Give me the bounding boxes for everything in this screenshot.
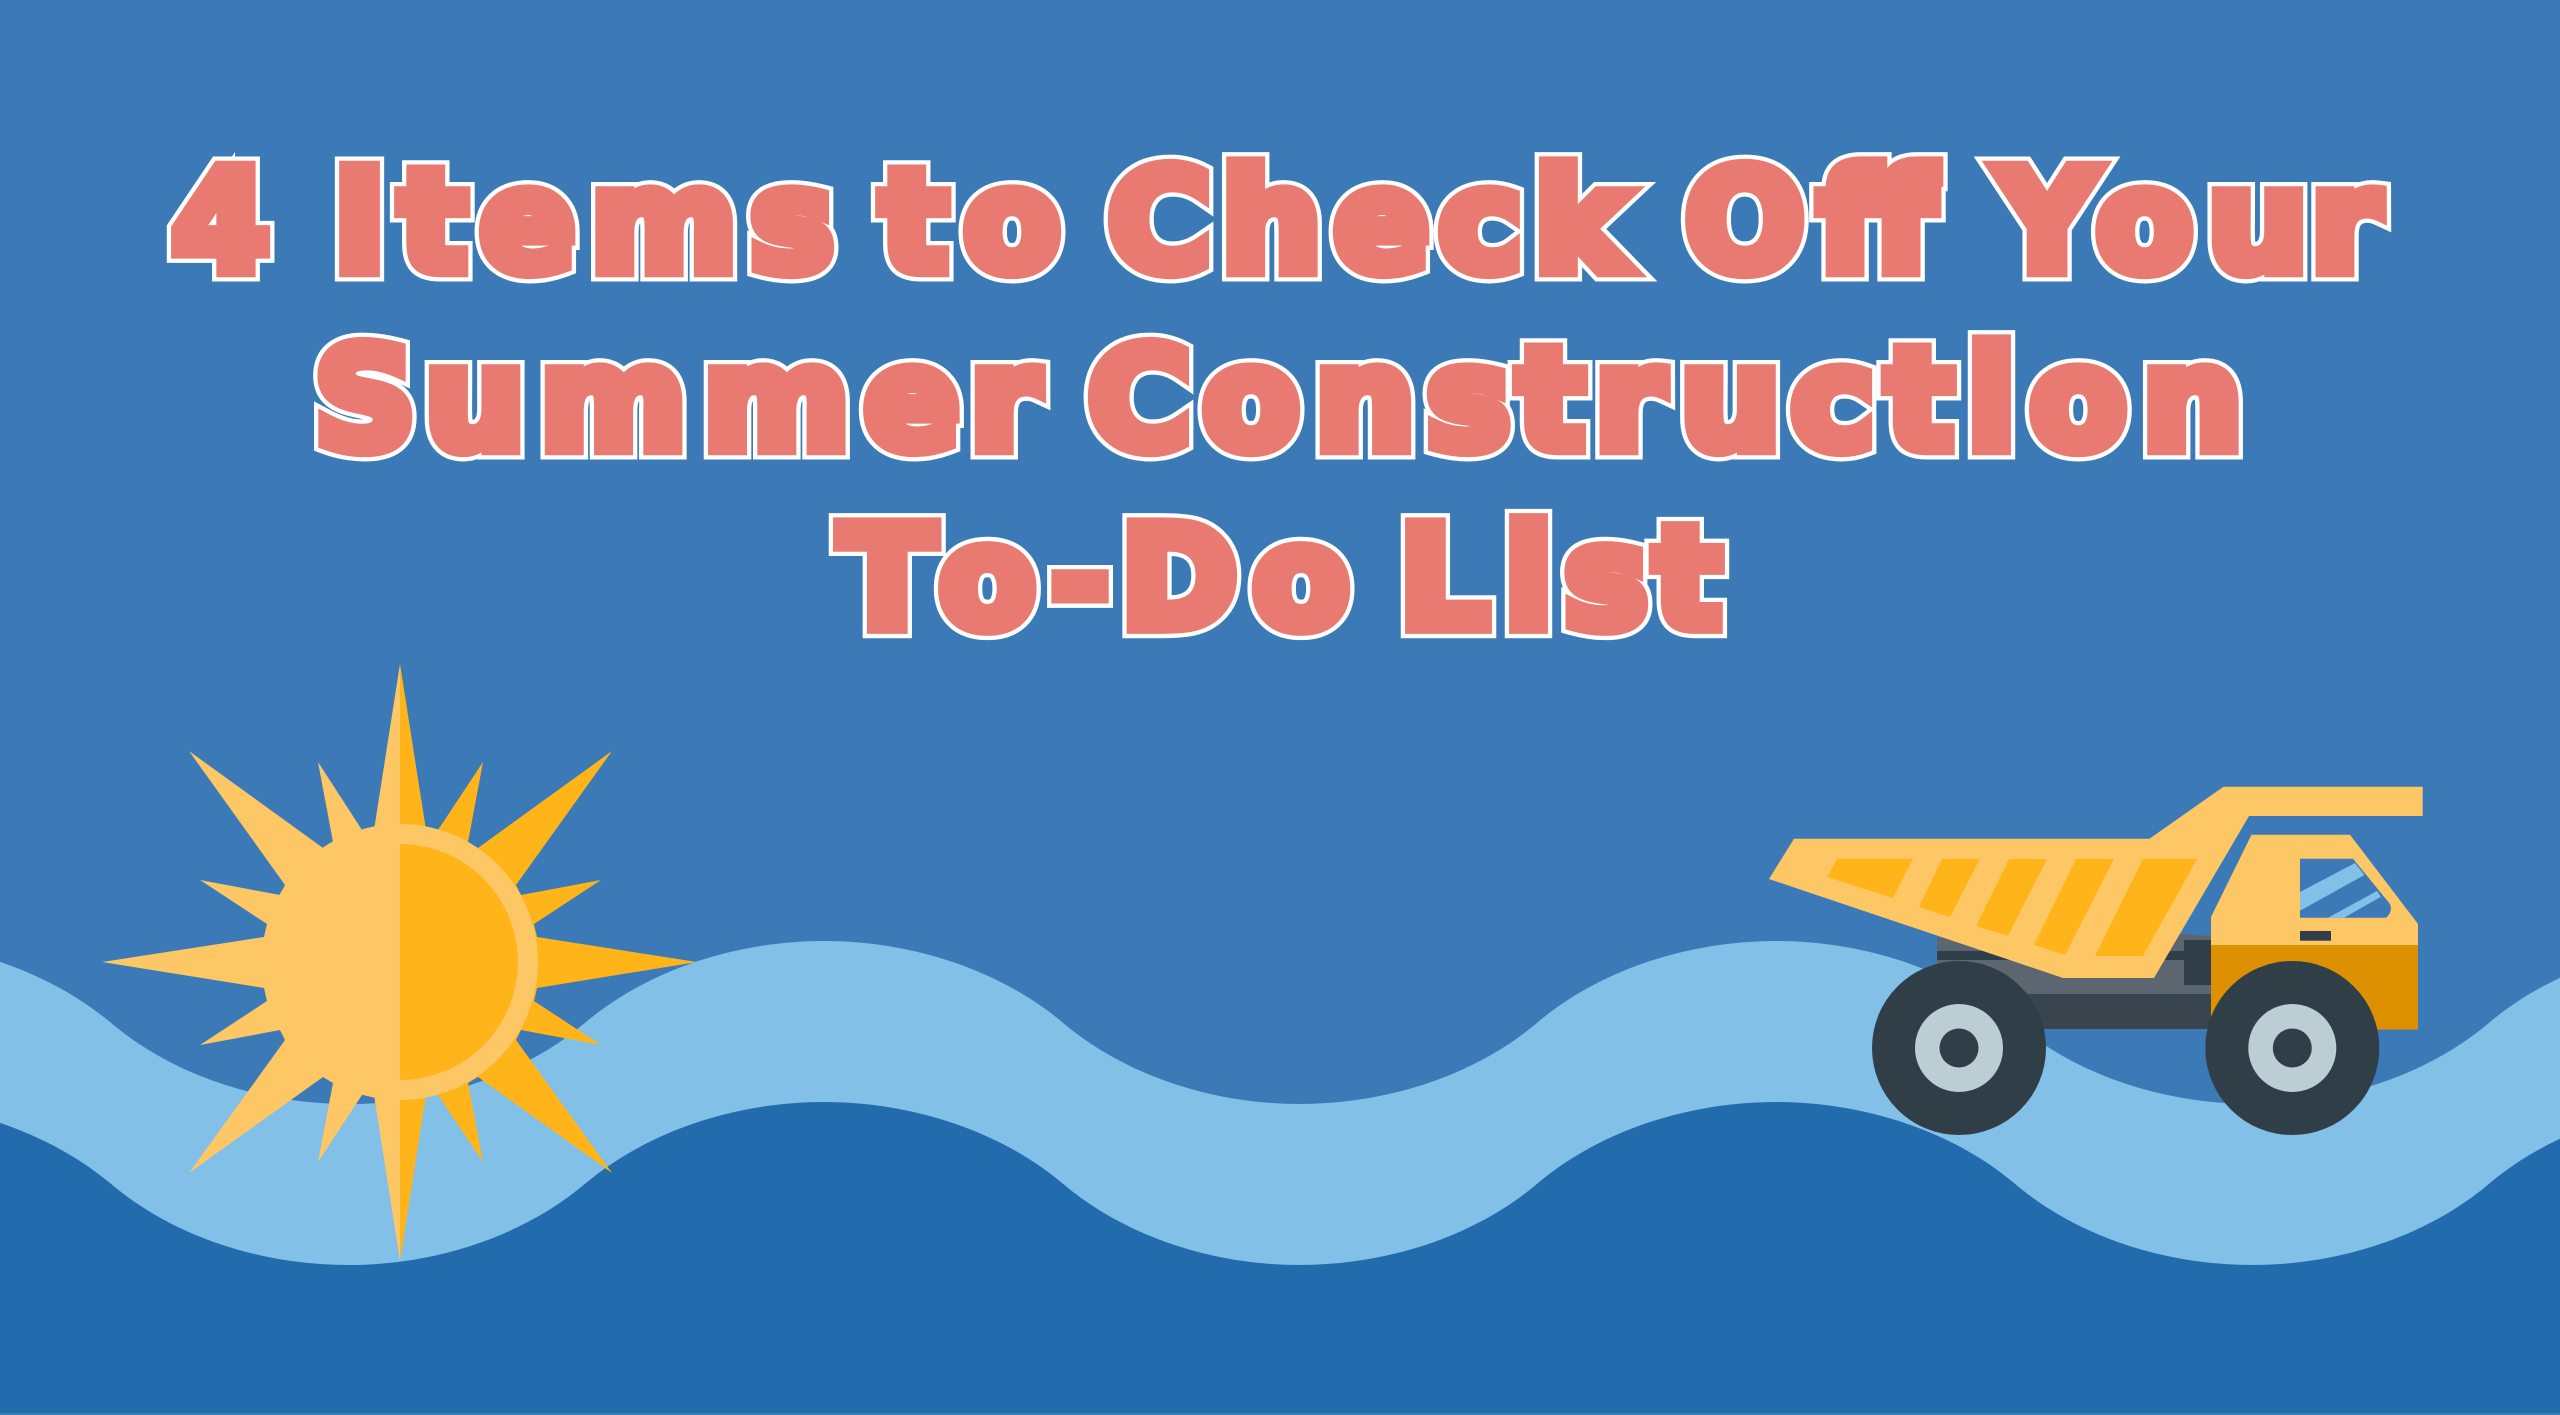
icon: dump truck: [1769, 787, 2423, 1135]
icon: sun: [102, 664, 697, 1261]
truck front wheel: [2205, 961, 2379, 1135]
light blue wave: [0, 941, 2560, 1413]
truck dump bed: [1769, 787, 2423, 978]
truck cab: [2211, 835, 2418, 1030]
title: [172, 141, 2380, 661]
truck chassis: [1937, 934, 2211, 1029]
title: 4 Items to Check Off Your: [172, 141, 2380, 304]
dark blue wave: [0, 1102, 2560, 1413]
title: Summer Construction: [315, 319, 2242, 482]
title: To-Do List: [840, 498, 1721, 661]
truck rear wheel: [1872, 961, 2046, 1135]
